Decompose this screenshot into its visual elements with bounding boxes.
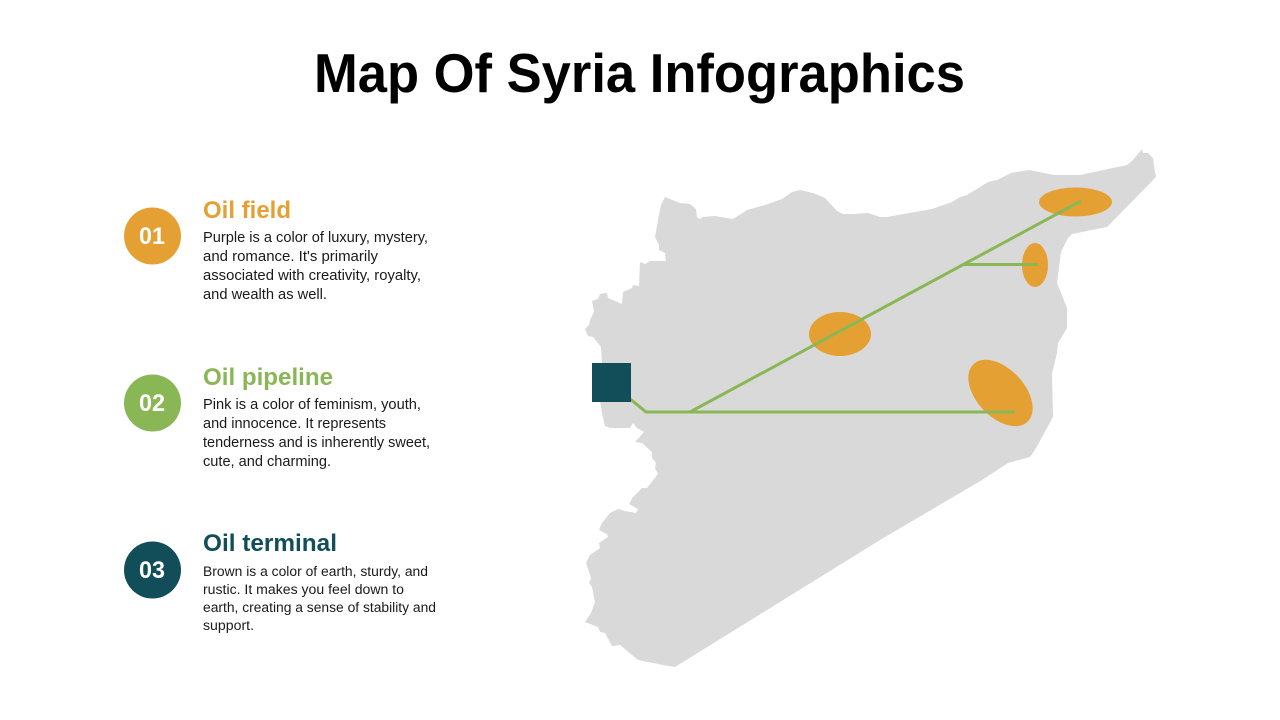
oil field: central [809,312,871,356]
description: oil field: Purple is a color of luxury, mystery, [203,230,428,246]
legend item: oil field [124,197,428,303]
map of Syria [585,149,1156,667]
legend item: oil pipeline [124,364,430,470]
description: oil field: associated with creativity, royalty, [203,268,421,284]
legend item: oil terminal [124,530,436,633]
heading: oil pipeline: Oil pipeline [203,364,333,391]
description: oil field [203,230,428,303]
number badge 01 [124,208,181,264]
oil field: east [1022,243,1048,287]
number badge 02: 02 [139,390,165,417]
number badge 02 [124,374,181,432]
description: oil pipeline [203,397,430,470]
number badge 03 [124,542,181,598]
description: oil terminal [203,564,436,633]
description: oil pipeline: Pink is a color of feminism, youth, [203,397,421,413]
description: oil terminal: earth, creating a sense of stability and [203,600,436,615]
oil field: south-east [956,348,1045,438]
description: oil pipeline: tenderness and is inherently sweet, [203,435,430,451]
description: oil pipeline: and innocence. It represents [203,416,386,432]
description: oil terminal: rustic. It makes you feel down to [203,582,404,597]
number badge 01: 01 [139,223,165,250]
description: oil pipeline: cute, and charming. [203,454,331,470]
number badge 03: 03 [139,557,165,584]
heading: oil field: Oil field [203,197,291,224]
description: oil field: and romance. It's primarily [203,249,379,265]
description: oil field: and wealth as well. [203,287,327,303]
oil field: north-east [1039,188,1112,216]
oil terminal [592,363,631,402]
description: oil terminal: support. [203,618,254,633]
description: oil terminal: Brown is a color of earth, sturdy, and [203,564,428,579]
title: Map Of Syria Infographics [314,42,965,104]
heading: oil terminal: Oil terminal [203,530,337,557]
country shape [585,149,1156,667]
oil pipeline network [629,201,1081,412]
